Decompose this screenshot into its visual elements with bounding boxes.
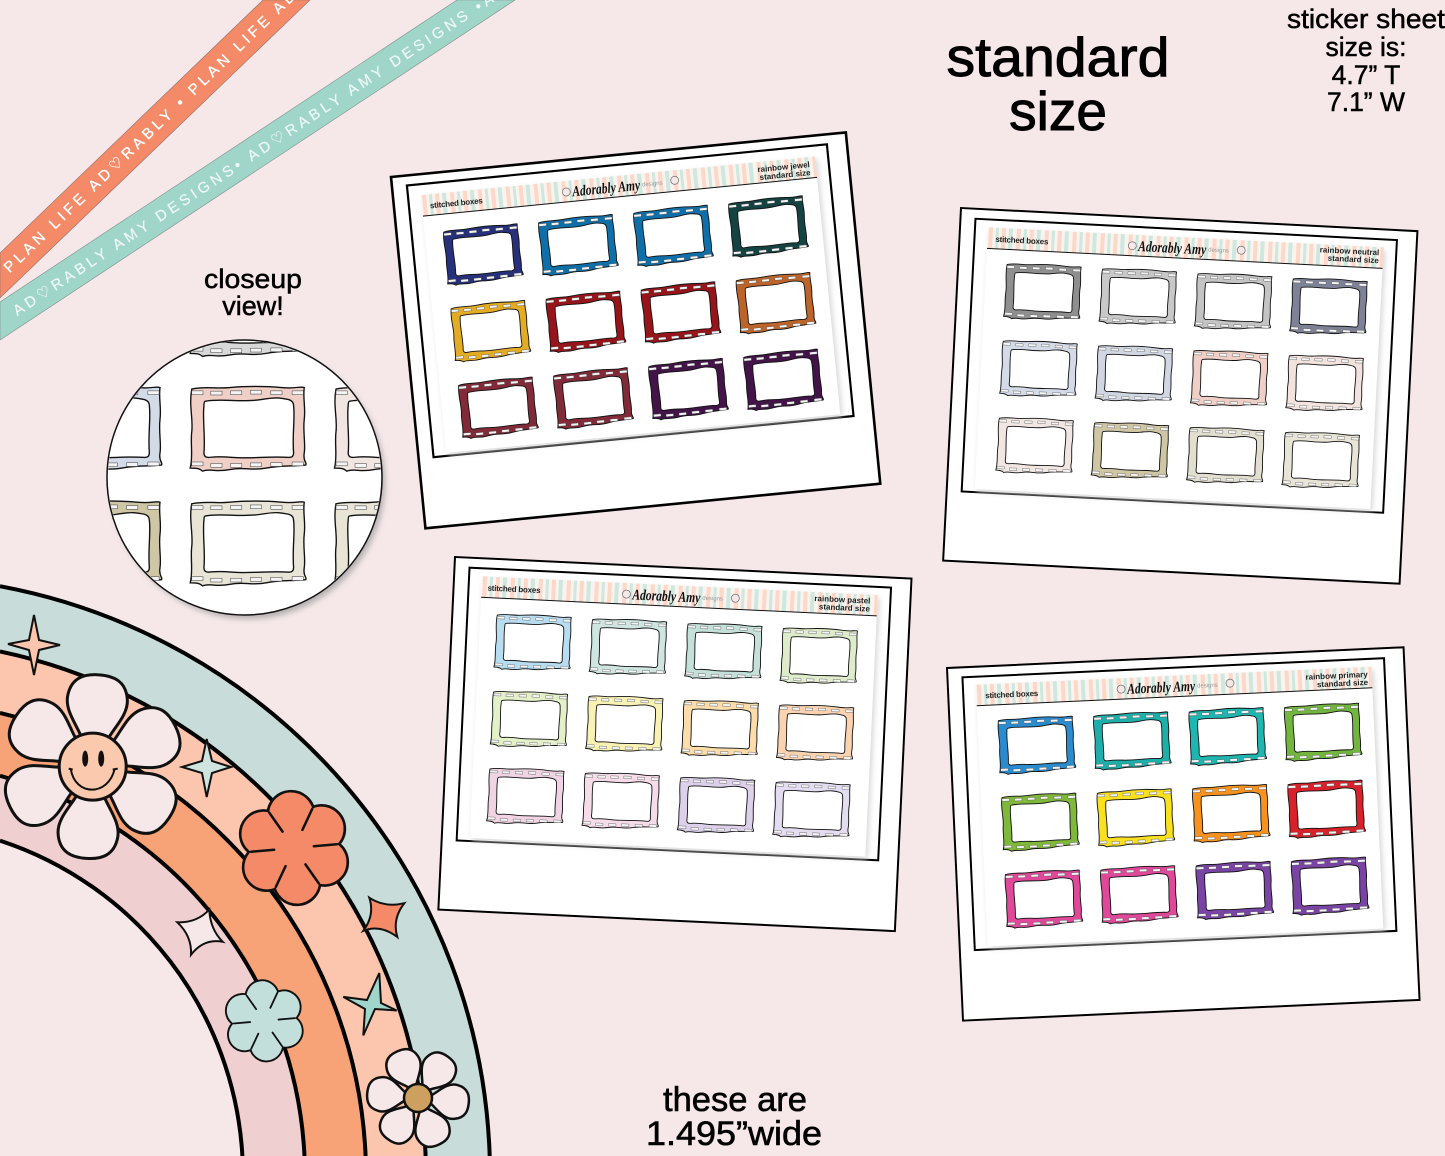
- icon: orange sparkle: [363, 898, 404, 937]
- icon: teal flower: [224, 978, 304, 1064]
- sheet name: standard size: [1317, 678, 1369, 689]
- icon: peach sparkle: [8, 615, 60, 675]
- sheet label: stitched boxes: [430, 196, 484, 210]
- text: these are 1.495 wide: these are: [663, 1081, 807, 1119]
- text: these are 1.495 wide: [646, 1081, 822, 1153]
- sheet label: stitched boxes: [995, 235, 1049, 246]
- closeup circle: [106, 339, 388, 622]
- icon: white sparkle: [177, 910, 223, 955]
- sheet name: rainbow neutral: [1320, 245, 1380, 257]
- text: sticker sheet size: 7.1” W: [1327, 87, 1405, 117]
- text: these are 1.495 wide: 1.495”wide: [646, 1115, 822, 1153]
- logo: Adorably Amy: [1126, 679, 1196, 698]
- sheet name: rainbow pastel: [814, 594, 871, 606]
- sheet name: standard size: [759, 168, 812, 182]
- panel: rainbow jewel sheet: [391, 132, 880, 528]
- ribbon: adorably amy designs: AD♡RABLY AMY DESIGNS• AD♡RABLY AMY DESIGNS •A: [10, 0, 497, 320]
- logo: designs: [1208, 248, 1229, 255]
- sheet name: rainbow jewel: [757, 160, 810, 174]
- sheet name: [1319, 245, 1380, 265]
- sheet name: standard size: [1328, 254, 1380, 265]
- panel: rainbow primary sheet: [947, 647, 1420, 1021]
- logo: Adorably Amy: [571, 178, 641, 200]
- text: sticker sheet size: [1287, 4, 1445, 117]
- sheet name: standard size: [819, 602, 871, 614]
- heading: standard size: standard: [946, 26, 1170, 88]
- icon: teal sparkle: [182, 739, 231, 797]
- logo: designs: [1197, 683, 1218, 690]
- sheet name: rainbow primary: [1305, 670, 1368, 682]
- heading: standard size: size: [1009, 80, 1107, 142]
- logo: designs: [642, 181, 663, 189]
- icon: teal star: [343, 973, 397, 1035]
- text: sticker sheet size: sticker sheet: [1287, 4, 1445, 34]
- text: closeup view: closeup: [204, 264, 302, 294]
- icon: orange flower: [238, 788, 350, 908]
- logo: Adorably Amy: [1137, 239, 1207, 258]
- sticker grid: [996, 263, 1369, 490]
- icon: white flower with tan centre: [365, 1044, 471, 1152]
- logo: [562, 174, 680, 201]
- sheet name: [814, 594, 871, 614]
- panel: rainbow neutral sheet: [943, 208, 1417, 584]
- rainbow: [0, 586, 490, 1156]
- logo: designs: [702, 596, 723, 603]
- text: closeup view: view!: [222, 291, 284, 321]
- sheet name: [757, 160, 812, 182]
- sheet label: stitched boxes: [985, 689, 1039, 700]
- text: closeup view: [204, 264, 302, 321]
- sticker grid: [442, 195, 824, 439]
- text: sticker sheet size: size is:: [1326, 32, 1406, 62]
- heading: standard size: [946, 26, 1170, 142]
- icon: smiley flower: [0, 673, 189, 860]
- logo: Adorably Amy: [631, 587, 701, 607]
- text: sticker sheet size: 4.7” T: [1332, 60, 1400, 90]
- panel: rainbow pastel sheet: [438, 557, 911, 931]
- sheet name: [1305, 670, 1369, 690]
- sticker grid: [997, 703, 1369, 929]
- sheet label: stitched boxes: [487, 584, 541, 595]
- sticker grid: [487, 613, 859, 840]
